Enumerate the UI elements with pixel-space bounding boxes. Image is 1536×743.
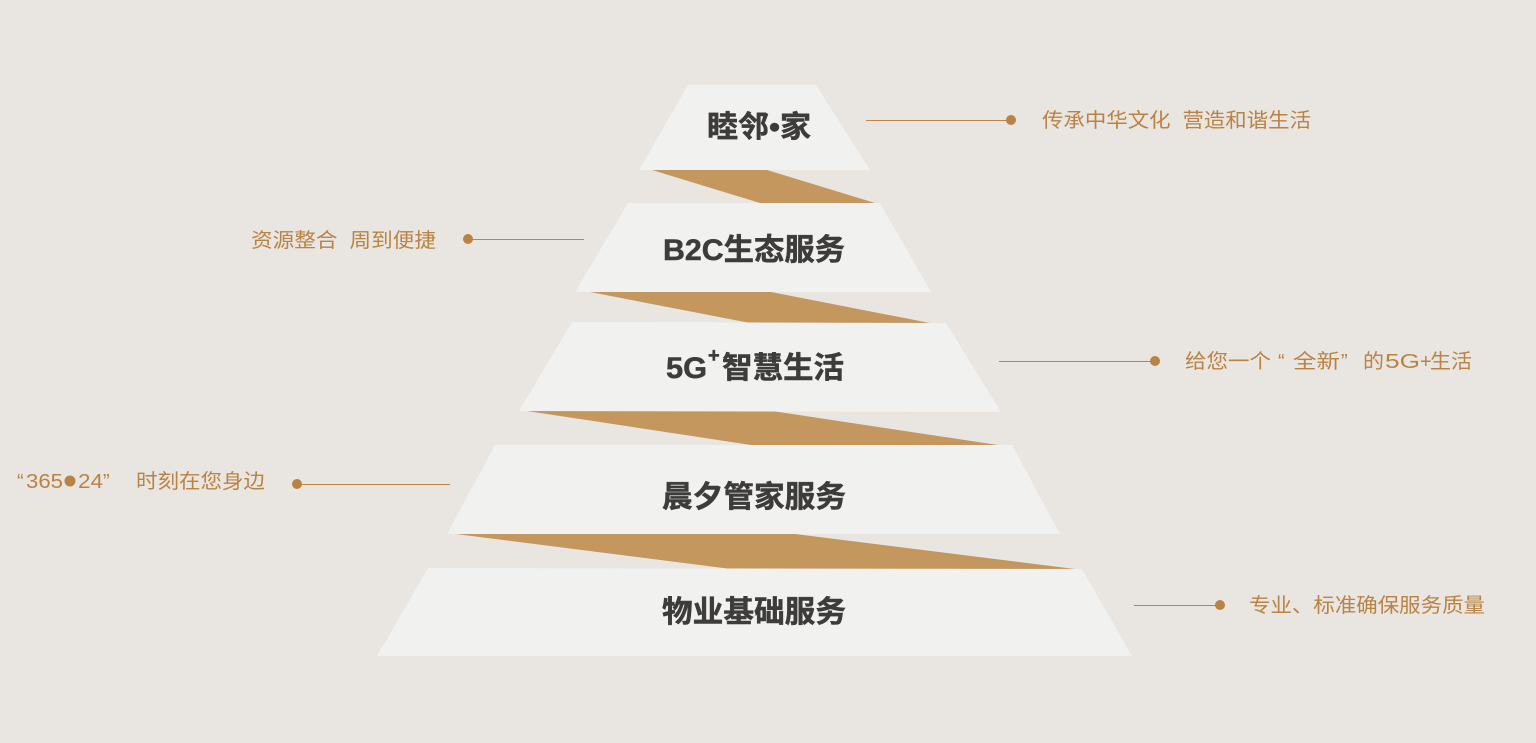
tier 3 xyxy=(519,322,1001,412)
tier 4: 晨夕管家服务 xyxy=(662,481,846,514)
callout 5 xyxy=(1134,594,1485,617)
callout 4: “ xyxy=(17,471,24,493)
callout 3: 生活 xyxy=(1430,350,1472,373)
callout 3: 的 xyxy=(1363,350,1384,373)
callout 3: 给您一个 xyxy=(1185,350,1271,373)
callout 3: 全新 xyxy=(1293,350,1340,373)
callout 2 xyxy=(251,229,584,252)
callout 4 xyxy=(17,470,450,493)
callout 4: 时刻在您身边 xyxy=(136,470,265,493)
tier 1 xyxy=(639,85,870,170)
callout 3: ” xyxy=(1341,351,1348,373)
tier 3: + xyxy=(708,345,720,367)
tier 1: 睦邻•家 xyxy=(707,111,811,144)
connector band 2 xyxy=(590,292,930,323)
callout 5: 专业、标准确保服务质量 xyxy=(1249,594,1485,617)
tier 2: B2C生态服务 xyxy=(663,234,845,267)
tier 5: 物业基础服务 xyxy=(662,596,846,629)
tier 3: 智慧生活 xyxy=(722,352,844,385)
callout 3: “ xyxy=(1278,351,1285,373)
callout 3 xyxy=(999,350,1472,373)
tier 3: 5G xyxy=(666,352,707,385)
callout 3: 5G xyxy=(1385,351,1420,373)
callout 4: 24 xyxy=(78,471,103,493)
connector band 1 xyxy=(652,170,875,203)
tier 5 xyxy=(377,568,1132,656)
callout 4: ” xyxy=(103,471,110,493)
tier 2 xyxy=(575,203,931,292)
connector band 3 xyxy=(527,411,998,445)
callout 3: + xyxy=(1420,351,1432,373)
tier 4 xyxy=(447,445,1060,534)
callout 1 xyxy=(866,109,1311,132)
callout 4: 365 xyxy=(26,471,63,493)
callout 1: 传承中华文化 营造和谐生活 xyxy=(1042,109,1311,132)
connector band 4 xyxy=(456,534,1075,569)
callout 2: 资源整合 周到便捷 xyxy=(251,229,436,252)
separator dot xyxy=(64,476,76,486)
